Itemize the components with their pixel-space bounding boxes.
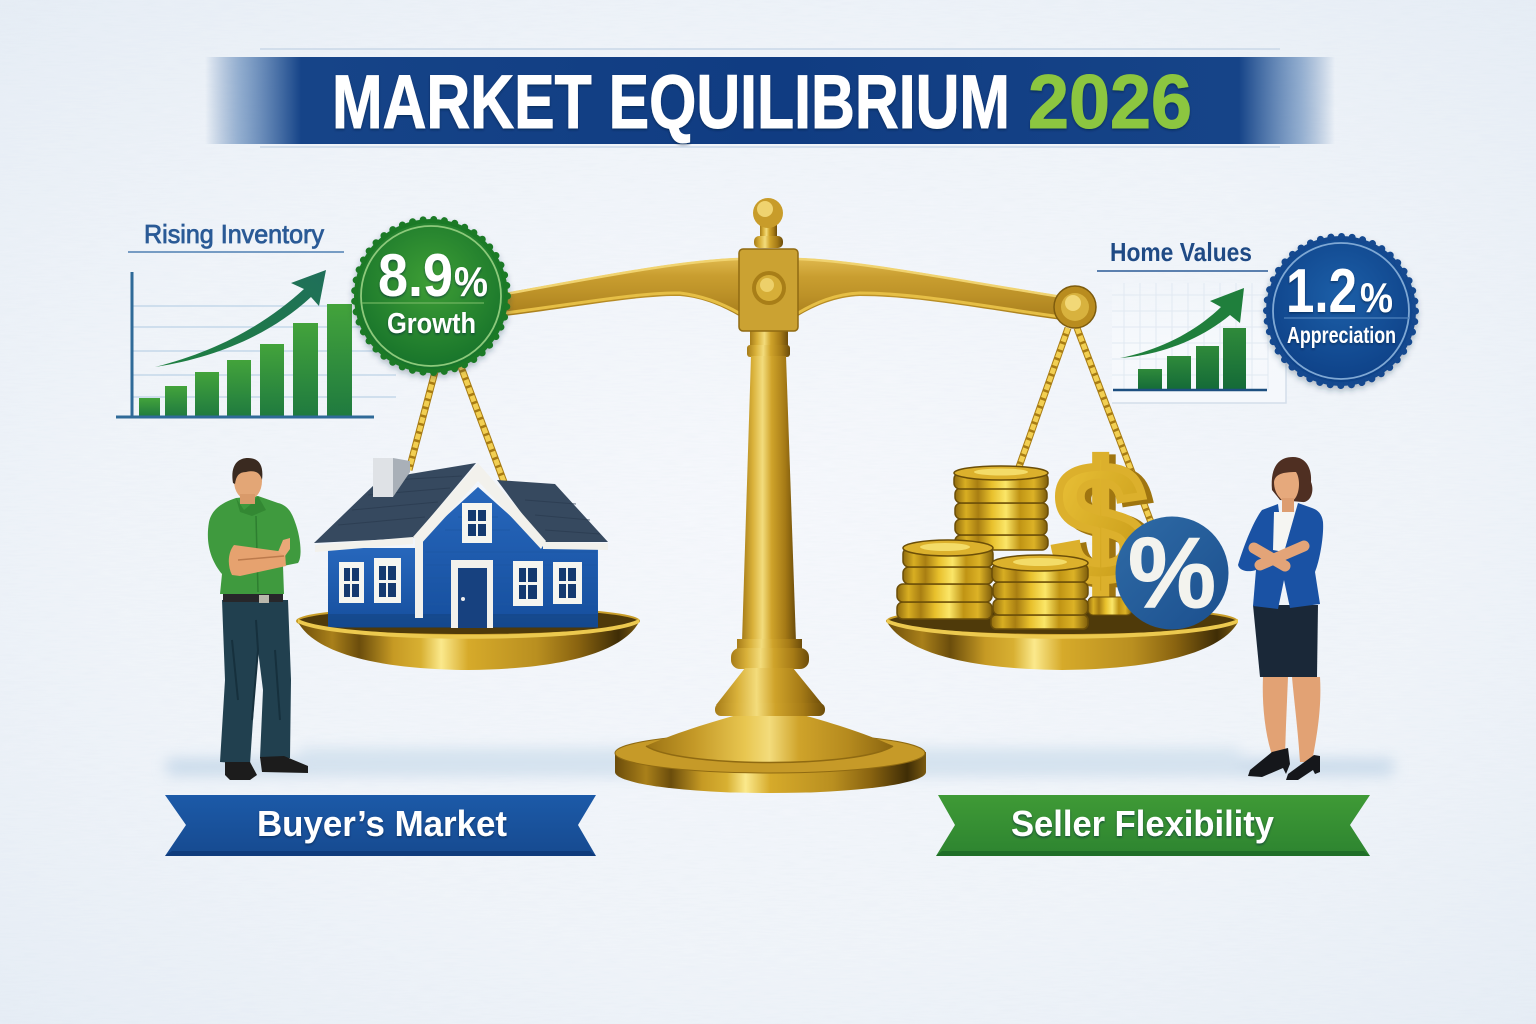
lower windows: [339, 558, 582, 606]
badge value: 1.2: [1286, 257, 1357, 326]
ribbon label: Buyer’s Market: [257, 803, 507, 844]
ribbon label: Seller Flexibility: [1011, 803, 1274, 844]
ribbon: buyer's market: [165, 795, 596, 856]
shoes: [225, 756, 308, 780]
face: [1274, 472, 1299, 502]
left chains: [409, 364, 504, 482]
chart heading: Home Values: [1110, 237, 1252, 267]
chart card: [1112, 283, 1286, 403]
blouse: [1273, 512, 1295, 552]
badge: 8.9% growth: [354, 219, 508, 373]
base: [615, 639, 926, 793]
finial: [753, 198, 783, 248]
ground shadow: [165, 748, 1395, 776]
ribbon: seller flexibility: [936, 795, 1370, 856]
badge value: 8.9: [378, 242, 453, 309]
upper window: [462, 503, 492, 543]
head: [234, 462, 262, 500]
badge label: Appreciation: [1287, 322, 1396, 348]
left coin stack: [897, 540, 993, 619]
belt: [223, 594, 283, 602]
trousers: [220, 600, 291, 764]
left pan with house: [297, 458, 639, 670]
dollar sign: $: [1053, 429, 1148, 619]
chart heading: Rising Inventory: [144, 219, 324, 249]
growth arrow: [1120, 288, 1244, 358]
shirt: [208, 496, 301, 594]
beam: [505, 258, 1062, 320]
heels: [1248, 748, 1320, 780]
eaves and gable trim: [315, 463, 608, 618]
panel: home values chart: [1097, 237, 1286, 403]
pan back: [887, 607, 1237, 635]
pan bowl: [298, 619, 639, 670]
house walls: [328, 548, 598, 627]
figure: man in green shirt: [208, 458, 308, 780]
figure: woman in blue blazer: [1238, 457, 1323, 780]
crossed arms: [229, 545, 286, 576]
title year: 2026: [1028, 60, 1192, 145]
title banner: [205, 49, 1335, 147]
blazer: [1238, 503, 1323, 609]
crossed arms: [1254, 546, 1304, 566]
roof: [314, 463, 608, 543]
growth arrow: [155, 270, 326, 367]
pan bowl: [887, 619, 1238, 670]
chart bars: [139, 304, 352, 417]
legs: [1263, 677, 1320, 762]
panel: rising inventory chart: [116, 219, 396, 417]
skirt: [1253, 605, 1318, 677]
title text: MARKET EQUILIBRIUM: [332, 60, 1010, 145]
scale stand: [409, 198, 1152, 793]
chimney: [373, 458, 410, 497]
badge percent sign: %: [454, 258, 488, 305]
percent disc: %: [1128, 517, 1216, 629]
pan back: [297, 607, 639, 635]
right beam end: [1054, 286, 1096, 328]
column: [742, 328, 796, 642]
right pan with coins: [887, 429, 1238, 670]
pivot block: [739, 249, 798, 331]
badge label: Growth: [387, 308, 476, 340]
house: [314, 458, 608, 628]
badge percent sign: %: [1360, 274, 1393, 321]
middle coin stack: [991, 555, 1088, 629]
dollar sign: $: [1059, 432, 1154, 622]
chart bars: [1138, 328, 1246, 390]
badge: 1.2% appreciation: [1266, 236, 1416, 386]
hair: [1272, 457, 1312, 502]
door: [451, 560, 493, 628]
top coin stack: [954, 466, 1048, 550]
coin under dollar: [1088, 597, 1132, 615]
right chains: [1019, 328, 1152, 525]
